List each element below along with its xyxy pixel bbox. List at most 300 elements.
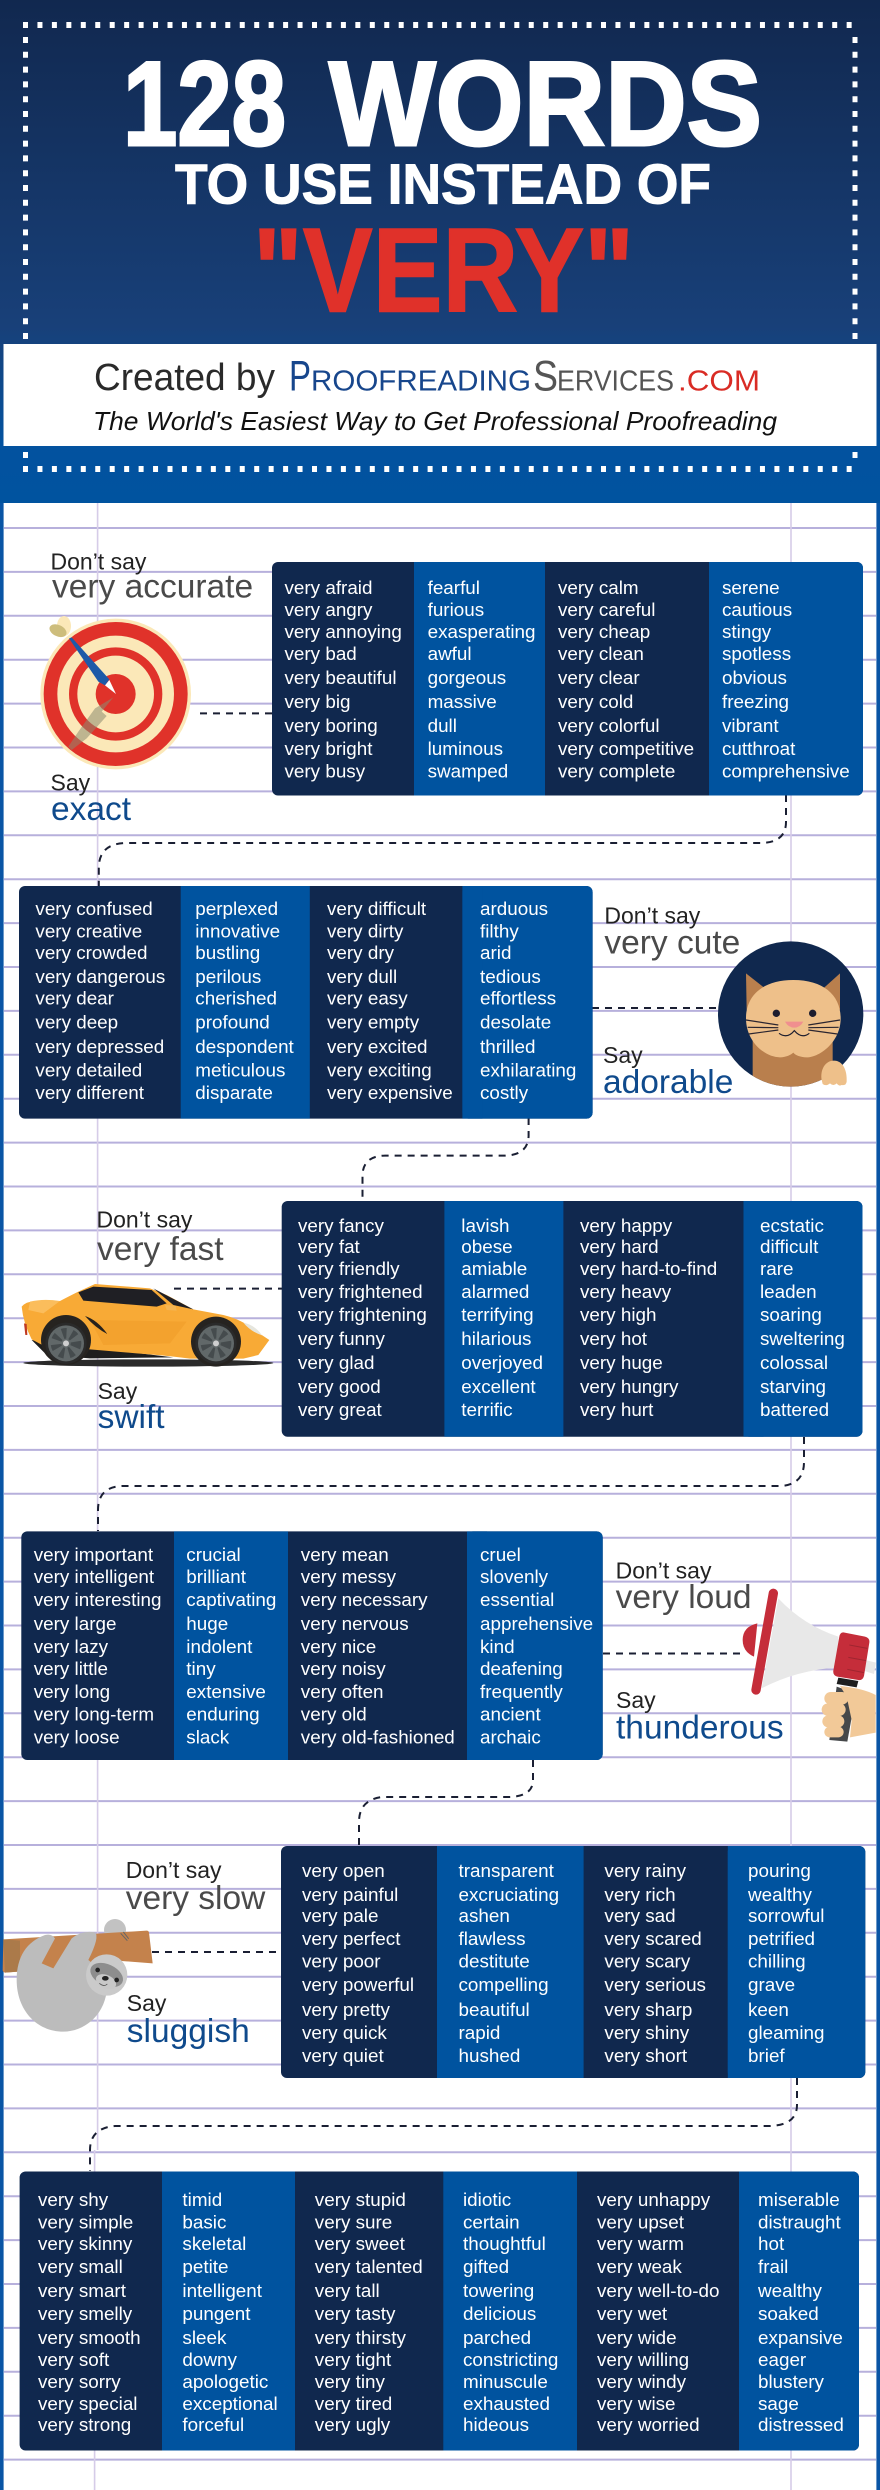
section 1 labels: Say [50, 770, 91, 796]
column 6: wealthy [757, 2280, 822, 2301]
column 3: very expensive [327, 1082, 453, 1103]
column 4: idiotic [463, 2189, 511, 2210]
connector: panel 3 to panel 4 [98, 1437, 804, 1531]
column 4: starving [760, 1376, 826, 1397]
panel 5: word list [281, 1846, 865, 2078]
column 1: very good [298, 1376, 381, 1397]
section 2 labels: Say [603, 1042, 643, 1068]
column 2: exceptional [182, 2393, 278, 2414]
column 5: very windy [597, 2371, 687, 2392]
column 1: very large [34, 1613, 116, 1634]
column 2: luminous [428, 738, 503, 759]
section 2 labels [603, 902, 740, 1101]
column 6: blustery [758, 2371, 825, 2392]
column 3: very nice [301, 1636, 376, 1657]
column 2: enduring [186, 1704, 260, 1725]
column 2: alarmed [461, 1281, 529, 1302]
column 4: kind [480, 1636, 515, 1657]
column 4: arid [480, 942, 511, 963]
column 2: bustling [195, 942, 260, 963]
column 3: very tired [315, 2393, 392, 2414]
column 3: very cheap [558, 621, 650, 642]
column 6: hot [758, 2233, 785, 2254]
column 1: very beautiful [284, 667, 397, 688]
title: 128 WORDS: 128 [123, 37, 286, 171]
section 3 labels: very fast [97, 1231, 224, 1268]
column 4: chilling [748, 1951, 806, 1972]
brand name [289, 352, 760, 400]
column 3: very high [580, 1304, 656, 1325]
column 1: very deep [35, 1012, 118, 1033]
header banner [0, 0, 880, 503]
column 4: cautious [722, 599, 792, 620]
column 1: very glad [298, 1352, 374, 1373]
section 1 labels: Don’t say [50, 548, 147, 574]
column 2: swamped [428, 761, 508, 782]
column 3: very competitive [558, 738, 694, 759]
column 4: desolate [480, 1012, 551, 1033]
column 5: very unhappy [597, 2189, 711, 2210]
connector: panel 4 to panel 5 [359, 1760, 533, 1846]
column 4: tedious [480, 966, 541, 987]
column 5: very upset [597, 2212, 685, 2233]
column 4: costly [480, 1082, 529, 1103]
section 4 labels [616, 1558, 784, 1746]
column 3: very hurt [580, 1399, 654, 1420]
column 2: petite [182, 2256, 229, 2277]
icon: sloth on branch [3, 1919, 153, 2032]
column 1: very big [284, 691, 350, 712]
column 3: very stupid [315, 2189, 406, 2210]
column 1: very poor [302, 1951, 381, 1972]
panel 2: word list [19, 886, 593, 1119]
column 3: very short [604, 2045, 688, 2066]
column 2: transparent [458, 1860, 555, 1881]
column 1: very loose [34, 1727, 120, 1748]
column 1: very boring [284, 715, 378, 736]
column 4: pouring [748, 1860, 811, 1881]
connector: panel 2 to cat [592, 1007, 720, 1009]
column 4: constricting [463, 2349, 558, 2370]
column 3: very thirsty [315, 2327, 406, 2348]
brand name: P [289, 352, 311, 400]
column 2: disparate [195, 1082, 273, 1103]
column 1: very dangerous [35, 966, 165, 987]
column 3: very necessary [301, 1589, 428, 1610]
section 2 labels: Don’t say [604, 902, 701, 928]
column 4: thoughtful [463, 2233, 546, 2254]
icon: megaphone [743, 1593, 876, 1742]
section 3 labels: Say [98, 1378, 138, 1404]
column 2: downy [182, 2349, 237, 2370]
column 4: rare [760, 1258, 794, 1279]
column 1: very skinny [38, 2233, 133, 2254]
column 6: frail [758, 2256, 788, 2277]
section 4 labels: Don’t say [616, 1558, 712, 1584]
column 3: very talented [315, 2256, 423, 2277]
column 1: very busy [284, 761, 366, 782]
column 3: very excited [327, 1036, 428, 1057]
column 4: certain [463, 2212, 520, 2233]
section 2 labels: very cute [604, 924, 740, 961]
column 5: very well-to-do [597, 2280, 720, 2301]
column 1: very fancy [298, 1215, 384, 1236]
column 4: sorrowful [748, 1905, 824, 1926]
column 4: frequently [480, 1681, 563, 1702]
column 2: perilous [195, 966, 261, 987]
column 3: very sad [604, 1905, 676, 1926]
column 2: lavish [461, 1215, 509, 1236]
section 3 labels: Don’t say [96, 1206, 193, 1232]
column 4: stingy [722, 621, 772, 642]
column 1: very special [38, 2393, 138, 2414]
column 4: colossal [760, 1352, 828, 1373]
section 5 labels [126, 1857, 266, 2050]
icon: dartboard [40, 616, 191, 769]
column 5: very warm [597, 2233, 684, 2254]
column 4: spotless [722, 643, 791, 664]
column 2: compelling [458, 1974, 549, 1995]
column 3: very hot [580, 1328, 648, 1349]
column 6: soaked [758, 2303, 819, 2324]
column 2: meticulous [195, 1060, 285, 1081]
column 2: obese [461, 1236, 513, 1257]
column 2: beautiful [458, 1999, 530, 2020]
column 2: slack [186, 1727, 230, 1748]
column 2: tiny [186, 1658, 216, 1679]
column 3: very complete [558, 761, 675, 782]
column 1: very crowded [35, 942, 147, 963]
column 1: very soft [38, 2349, 110, 2370]
column 2: flawless [458, 1928, 526, 1949]
column 4: apprehensive [480, 1613, 593, 1634]
column 2: extensive [186, 1681, 266, 1702]
connector: panel 4 to megaphone [603, 1652, 745, 1654]
column 3: very heavy [580, 1281, 672, 1302]
title: 128 WORDS [123, 37, 762, 171]
panel 3: word list [282, 1201, 862, 1437]
connector: panel 5 to panel 6 [90, 2078, 797, 2171]
column 4: parched [463, 2327, 531, 2348]
connector: sloth to panel 5 [152, 1951, 281, 1953]
column 3: very noisy [301, 1658, 386, 1679]
column 1: very creative [35, 921, 142, 942]
tagline: The World's Easiest Way to Get Professional Proofreading [93, 406, 778, 436]
column 1: very frightening [298, 1304, 427, 1325]
column 2: apologetic [182, 2371, 268, 2392]
column 1: very confused [35, 898, 153, 919]
column 3: very hard [580, 1236, 659, 1257]
column 3: very careful [558, 599, 655, 620]
column 1: very great [298, 1399, 383, 1420]
column 4: comprehensive [722, 761, 850, 782]
column 3: very clear [558, 667, 640, 688]
connector: target to panel 1 [200, 712, 272, 714]
column 2: profound [195, 1012, 270, 1033]
column 3: very mean [301, 1544, 389, 1565]
column 1: very little [34, 1658, 108, 1679]
icon: cat [718, 941, 863, 1090]
column 2: hushed [458, 2045, 520, 2066]
column 2: ashen [458, 1905, 510, 1926]
column 2: terrific [461, 1399, 513, 1420]
column 1: very intelligent [34, 1566, 155, 1587]
column 1: very different [35, 1082, 145, 1103]
column 2: brilliant [186, 1566, 247, 1587]
section 5 labels: Don’t say [126, 1857, 222, 1883]
column 2: timid [182, 2189, 222, 2210]
column 3: very tall [315, 2280, 380, 2301]
column 1: very angry [284, 599, 373, 620]
column 1: very sorry [38, 2371, 121, 2392]
column 4: delicious [463, 2303, 536, 2324]
column 3: very difficult [327, 898, 427, 919]
column 2: excellent [461, 1376, 536, 1397]
column 1: very long [34, 1681, 110, 1702]
column 3: very hard-to-find [580, 1258, 717, 1279]
column 3: very cold [558, 691, 633, 712]
section 1 labels: very accurate [52, 568, 253, 605]
column 1: very perfect [302, 1928, 401, 1949]
column 2: hilarious [461, 1328, 531, 1349]
column 6: distressed [758, 2414, 844, 2435]
section 2 labels: adorable [603, 1064, 733, 1101]
column 3: very clean [558, 643, 644, 664]
column 6: eager [758, 2349, 806, 2370]
column 3: very messy [301, 1566, 397, 1587]
column 1: very frightened [298, 1281, 423, 1302]
column 4: minuscule [463, 2371, 548, 2392]
column 1: very detailed [35, 1060, 142, 1081]
column 3: very nervous [301, 1613, 409, 1634]
column 6: distraught [758, 2212, 842, 2233]
column 1: very pale [302, 1905, 378, 1926]
column 2: amiable [461, 1258, 527, 1279]
column 2: innovative [195, 921, 280, 942]
column 3: very tight [315, 2349, 392, 2370]
brand name: S [533, 352, 558, 400]
column 4: leaden [760, 1281, 817, 1302]
column 4: battered [760, 1399, 829, 1420]
section 3 labels: swift [98, 1399, 165, 1436]
column 2: skeletal [182, 2233, 246, 2254]
column 1: very afraid [284, 577, 372, 598]
column 3: very tiny [315, 2371, 386, 2392]
column 4: archaic [480, 1727, 541, 1748]
column 3: very happy [580, 1215, 673, 1236]
column 2: intelligent [182, 2280, 263, 2301]
column 5: very wet [597, 2303, 668, 2324]
section 1 labels: exact [51, 791, 132, 828]
column 4: exhausted [463, 2393, 550, 2414]
column 3: very sure [315, 2212, 392, 2233]
column 2: rapid [458, 2022, 500, 2043]
column 5: very weak [597, 2256, 682, 2277]
column 4: serene [722, 577, 780, 598]
column 1: very funny [298, 1328, 386, 1349]
column 2: gorgeous [428, 667, 506, 688]
connector: car to panel 3 [174, 1288, 282, 1290]
column 4: cutthroat [722, 738, 796, 759]
panel 4: word list [21, 1531, 603, 1760]
column 1: very fat [298, 1236, 361, 1257]
column 3: very sweet [315, 2233, 406, 2254]
column 3: very scared [604, 1928, 702, 1949]
column 6: sage [758, 2393, 799, 2414]
column 1: very simple [38, 2212, 133, 2233]
column 3: very old [301, 1704, 367, 1725]
column 3: very empty [327, 1012, 420, 1033]
column 6: miserable [758, 2189, 840, 2210]
column 3: very huge [580, 1352, 663, 1373]
panel 6: word list [20, 2172, 859, 2450]
column 2: crucial [186, 1544, 241, 1565]
title: 128 WORDS: WORDS [329, 37, 762, 171]
column 4: obvious [722, 667, 787, 688]
column 4: deafening [480, 1658, 563, 1679]
column 3: very shiny [604, 2022, 690, 2043]
column 2: dull [428, 715, 457, 736]
column 1: very important [34, 1544, 154, 1565]
column 4: slovenly [480, 1566, 549, 1587]
section 5 labels: Say [127, 1990, 167, 2016]
panel 1: word list [272, 562, 863, 796]
connector: panel 2 to panel 3 [362, 1118, 529, 1201]
column 2: fearful [428, 577, 480, 598]
column 1: very long-term [34, 1704, 154, 1725]
column 4: wealthy [747, 1884, 812, 1905]
column 4: ancient [480, 1704, 542, 1725]
column 2: massive [428, 691, 497, 712]
column 2: basic [182, 2212, 226, 2233]
column 4: soaring [760, 1304, 822, 1325]
column 3: very tasty [315, 2303, 396, 2324]
column 1: very bright [284, 738, 373, 759]
column 4: cruel [480, 1544, 521, 1565]
icon: sports car [22, 1284, 273, 1367]
brand name: ROOFREADING [311, 366, 531, 398]
column 4: keen [748, 1999, 789, 2020]
column 1: very painful [302, 1884, 398, 1905]
column 1: very friendly [298, 1258, 400, 1279]
section 1 labels [50, 548, 253, 828]
column 4: essential [480, 1589, 554, 1610]
column 4: hideous [463, 2414, 529, 2435]
title: very: "VERY" [253, 204, 634, 338]
brand name: ERVICES [557, 366, 674, 398]
column 2: sleek [182, 2327, 227, 2348]
column 2: exasperating [428, 621, 536, 642]
column 3: very easy [327, 988, 408, 1009]
column 4: sweltering [760, 1328, 845, 1349]
column 2: destitute [458, 1951, 530, 1972]
column 2: cherished [195, 988, 277, 1009]
column 2: terrifying [461, 1304, 534, 1325]
column 4: filthy [480, 921, 519, 942]
created by: Created by [94, 357, 275, 399]
column 4: vibrant [722, 715, 779, 736]
column 4: gleaming [748, 2022, 824, 2043]
column 1: very quiet [302, 2045, 384, 2066]
column 6: expansive [758, 2327, 843, 2348]
column 3: very dry [327, 942, 395, 963]
column 1: very quick [302, 2022, 387, 2043]
credit band [4, 344, 876, 446]
section 4 labels: thunderous [616, 1710, 784, 1746]
column 2: furious [428, 599, 484, 620]
column 4: grave [748, 1974, 795, 1995]
column 5: very willing [597, 2349, 689, 2370]
column 3: very dull [327, 966, 397, 987]
column 3: very serious [604, 1974, 706, 1995]
connector: panel 1 to panel 2 [99, 795, 786, 886]
section 4 labels: Say [616, 1687, 656, 1713]
column 4: difficult [760, 1236, 819, 1257]
column 3: very scary [604, 1951, 691, 1972]
column 3: very colorful [558, 715, 660, 736]
section 4 labels: very loud [616, 1579, 752, 1616]
column 5: very wise [597, 2393, 676, 2414]
column 2: indolent [186, 1636, 253, 1657]
title: to use instead of: TO USE INSTEAD OF [175, 152, 711, 216]
column 4: petrified [748, 1928, 815, 1949]
column 4: ecstatic [760, 1215, 824, 1236]
column 1: very depressed [35, 1036, 164, 1057]
column 4: towering [463, 2280, 534, 2301]
column 4: arduous [480, 898, 548, 919]
column 2: awful [428, 643, 472, 664]
column 4: thrilled [480, 1036, 536, 1057]
column 2: captivating [186, 1589, 276, 1610]
column 4: effortless [480, 988, 556, 1009]
column 1: very small [38, 2256, 123, 2277]
column 2: excruciating [458, 1884, 559, 1905]
section 5 labels: sluggish [127, 2013, 250, 2050]
column 1: very open [302, 1860, 385, 1881]
column 3: very exciting [327, 1060, 432, 1081]
column 3: very sharp [604, 1999, 692, 2020]
column 1: very smelly [38, 2303, 133, 2324]
column 1: very bad [284, 643, 357, 664]
column 1: very shy [38, 2189, 109, 2210]
column 2: despondent [195, 1036, 295, 1057]
column 3: very often [301, 1681, 384, 1702]
section 3 labels [96, 1206, 224, 1436]
column 1: very powerful [302, 1974, 414, 1995]
column 1: very strong [38, 2414, 131, 2435]
column 1: very interesting [34, 1589, 161, 1610]
column 3: very ugly [315, 2414, 391, 2435]
column 1: very pretty [302, 1999, 391, 2020]
column 3: very hungry [580, 1376, 679, 1397]
brand name: .COM [678, 366, 760, 398]
column 2: huge [186, 1613, 228, 1634]
column 2: overjoyed [461, 1352, 543, 1373]
column 4: freezing [722, 691, 789, 712]
column 3: very rich [604, 1884, 676, 1905]
column 2: perplexed [195, 898, 278, 919]
column 4: gifted [463, 2256, 509, 2277]
column 3: very calm [558, 577, 639, 598]
column 5: very wide [597, 2327, 677, 2348]
column 2: pungent [182, 2303, 251, 2324]
column 4: exhilarating [480, 1060, 576, 1081]
column 2: forceful [182, 2414, 244, 2435]
column 1: very annoying [284, 621, 402, 642]
column 1: very smooth [38, 2327, 141, 2348]
column 4: brief [748, 2045, 785, 2066]
column 5: very worried [597, 2414, 700, 2435]
